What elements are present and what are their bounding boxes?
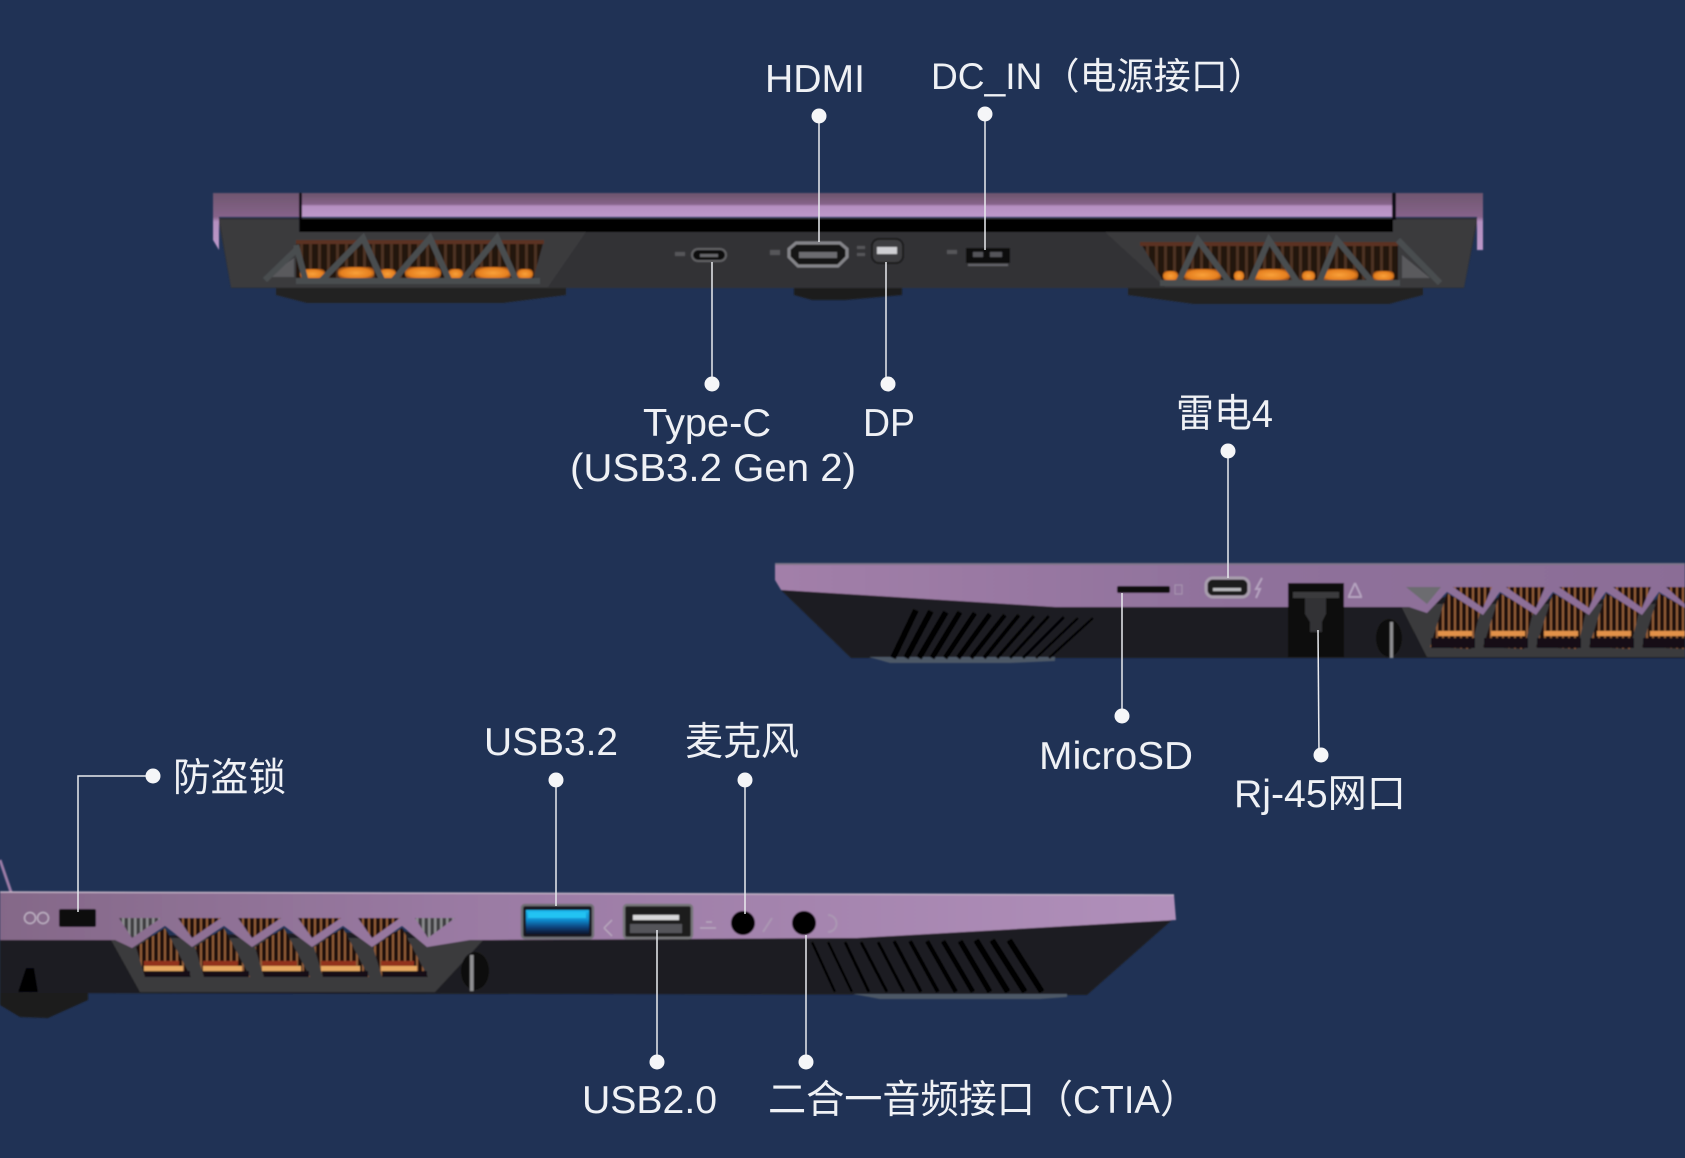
- rear body: [218, 218, 1478, 288]
- port: microphone: [731, 911, 772, 935]
- callout: lock: 防盗锁: [173, 757, 286, 800]
- hinge edge: [0, 860, 11, 892]
- panel: right side laptop: [775, 563, 1685, 663]
- side vent lattice: [1400, 604, 1685, 657]
- side triangle holes: [1406, 587, 1685, 608]
- right vent panel: [1105, 220, 1476, 287]
- callout: microphone: 麦克风: [685, 721, 799, 764]
- left foot strip: [853, 994, 1067, 999]
- side top edge highlight: [775, 563, 1685, 565]
- callout: HDMI: [765, 58, 865, 242]
- port: USB 2.0: [624, 905, 716, 938]
- callout: lock: [78, 757, 286, 912]
- side foot: [869, 657, 1055, 663]
- callout: Type-C: Type-C: [643, 402, 771, 445]
- callout: DC IN: [931, 56, 1265, 250]
- side notch: [1376, 619, 1402, 658]
- left foot: [0, 990, 88, 1018]
- left lid purple: [0, 892, 1176, 948]
- callout: DC IN: DC_IN（电源接口）: [931, 56, 1265, 97]
- rear feet: [276, 287, 1423, 304]
- bottom vents: [136, 928, 428, 977]
- panel: left side laptop: [0, 860, 1176, 1018]
- side lid purple: [775, 563, 1685, 615]
- bottom grill: [812, 940, 1042, 992]
- panel: rear view laptop: [213, 193, 1483, 304]
- callout: DP: [863, 262, 915, 445]
- left vent panel: [220, 220, 586, 287]
- vent lattice: [110, 938, 485, 992]
- left lid top edge: [0, 892, 1174, 895]
- callout: audio combo: [768, 935, 1198, 1122]
- callout: DP: DP: [863, 402, 915, 445]
- left body: [0, 920, 1172, 995]
- triangle holes: [119, 918, 455, 938]
- callout: RJ-45: Rj-45网口: [1234, 773, 1406, 816]
- callout: RJ-45: [1234, 630, 1406, 816]
- side vents: [1430, 593, 1685, 649]
- port: Type-C: [675, 249, 726, 261]
- callout: USB3.2: USB3.2: [484, 721, 618, 764]
- callout: microphone: [685, 721, 799, 914]
- callout: MicroSD: [1039, 593, 1193, 778]
- lock slot: [24, 909, 96, 927]
- port: USB 3.2: [522, 905, 612, 938]
- callout: HDMI: HDMI: [765, 58, 865, 101]
- callout: audio combo: 二合一音频接口（CTIA）: [768, 1079, 1198, 1122]
- port: Thunderbolt 4: [1206, 578, 1262, 598]
- callout: Thunderbolt 4: [1176, 393, 1273, 578]
- callout: Type-C: [570, 262, 856, 490]
- callout: Thunderbolt 4: 雷电4: [1176, 393, 1273, 436]
- port: DC IN: [947, 248, 1010, 266]
- rear black hinge band: [300, 219, 1394, 232]
- callout: Type-C: (USB3.2 Gen 2): [570, 447, 856, 490]
- callout: USB2.0: [582, 930, 717, 1122]
- callout: MicroSD: MicroSD: [1039, 735, 1193, 778]
- side grill: [893, 610, 1093, 658]
- callout: USB2.0: USB2.0: [582, 1079, 717, 1122]
- port: MicroSD: [1117, 585, 1182, 594]
- port: RJ-45: [1288, 583, 1362, 657]
- notch: [461, 952, 489, 991]
- port: audio: [792, 911, 836, 935]
- rear lid: [213, 193, 1483, 250]
- port: HDMI: [770, 243, 847, 266]
- side body: [781, 590, 1685, 658]
- port: DP: [857, 239, 903, 263]
- lower left notch: [18, 968, 38, 992]
- callout: USB3.2: [484, 721, 618, 906]
